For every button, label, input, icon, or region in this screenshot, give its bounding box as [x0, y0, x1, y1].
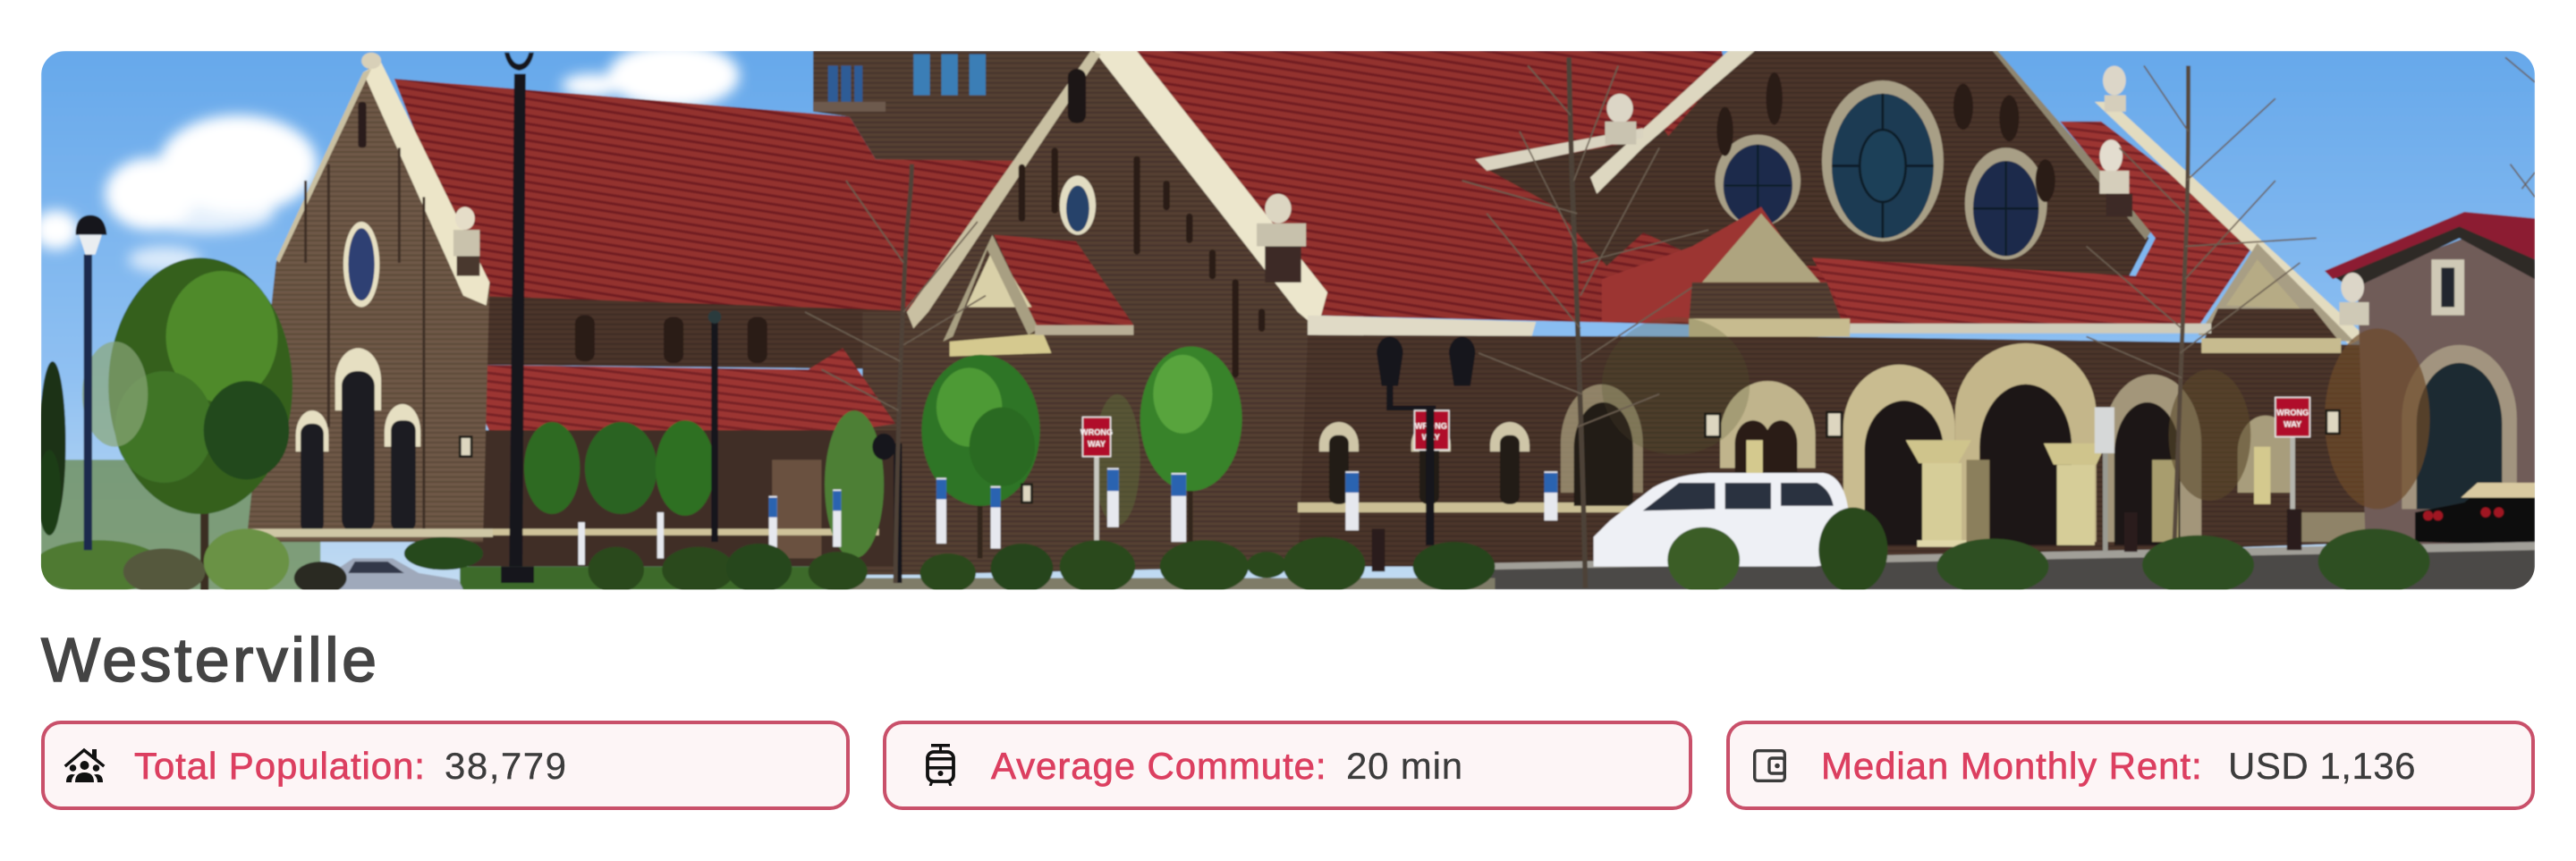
center gable trim	[1094, 51, 1327, 328]
sky	[41, 51, 2535, 589]
photo: Westerville church building	[41, 51, 2535, 590]
value: average commute: 20 min	[1346, 745, 1463, 787]
clouds	[33, 43, 740, 273]
lower right wall	[1692, 335, 2390, 567]
parking signs	[579, 468, 1557, 565]
wrong way signs: WAY	[1088, 440, 1106, 449]
small right pediment	[2199, 243, 2354, 342]
pavement and grass	[460, 542, 2535, 589]
stat card: average commute	[883, 721, 1692, 810]
distant foliage	[41, 460, 320, 589]
lower left wall	[468, 430, 920, 567]
foreground low bushes left	[33, 528, 483, 595]
round windows	[1716, 72, 2055, 259]
wrong way signs	[1080, 397, 2309, 552]
left gable wall	[247, 63, 489, 542]
left gable windows	[296, 102, 424, 534]
wall lanterns	[460, 410, 2340, 502]
left gable trim	[363, 63, 489, 306]
white car	[1594, 473, 1848, 567]
wrong way signs: WRONG	[1080, 428, 1113, 437]
center gable wall	[895, 51, 1323, 575]
center right wall	[1298, 335, 1708, 567]
bollards	[1372, 509, 2301, 571]
tower	[813, 51, 1104, 165]
value: total population: 38,779	[445, 745, 567, 787]
center gable ornaments	[1019, 69, 1306, 377]
stat card: total population	[41, 721, 850, 810]
lower right roof	[1812, 122, 2258, 332]
right trim and finials	[2095, 65, 2366, 345]
small left pediment	[1602, 207, 1843, 328]
wrong way signs: WAY	[2284, 420, 2301, 429]
left main roof	[394, 79, 1031, 316]
left green trees	[38, 257, 292, 591]
stat card: median monthly rent	[1726, 721, 2535, 810]
lamp posts	[75, 53, 1475, 583]
back wall filler	[862, 312, 928, 575]
big center roof	[1133, 51, 1857, 328]
value: median monthly rent: USD 1,136	[2228, 745, 2416, 787]
label: total population: Total Population:	[134, 745, 426, 787]
right upper gable wall	[1602, 51, 2148, 276]
central eave	[1308, 316, 1536, 338]
right gable left trim	[1590, 51, 1755, 194]
icon: tram	[926, 744, 955, 786]
small center porch	[943, 235, 1133, 357]
label: average commute: Average Commute:	[991, 745, 1326, 787]
columns	[1906, 440, 2179, 547]
icon: wallet	[1753, 749, 1786, 782]
entrance arches	[1720, 343, 2293, 545]
silver car	[334, 558, 463, 589]
bare trees	[805, 57, 2535, 588]
label: median monthly rent: Median Monthly Rent:	[1821, 745, 2203, 787]
heading: Westerville: Westerville	[41, 625, 379, 695]
small arches on center wall	[1319, 384, 1643, 506]
shrubs	[589, 508, 2430, 595]
wrong way signs: WRONG	[2276, 409, 2309, 418]
black car	[2415, 483, 2535, 545]
neighbouring mauve building	[2325, 212, 2535, 550]
wrong way signs: WRONG	[1415, 421, 1447, 430]
dormer wall under eave	[1489, 130, 1669, 266]
green courtyard trees	[524, 317, 2430, 558]
dark clerestory band	[487, 296, 908, 370]
wrong way signs: WAY	[1422, 433, 1440, 442]
lower left roof	[485, 347, 895, 432]
icon: house with people	[64, 747, 106, 782]
